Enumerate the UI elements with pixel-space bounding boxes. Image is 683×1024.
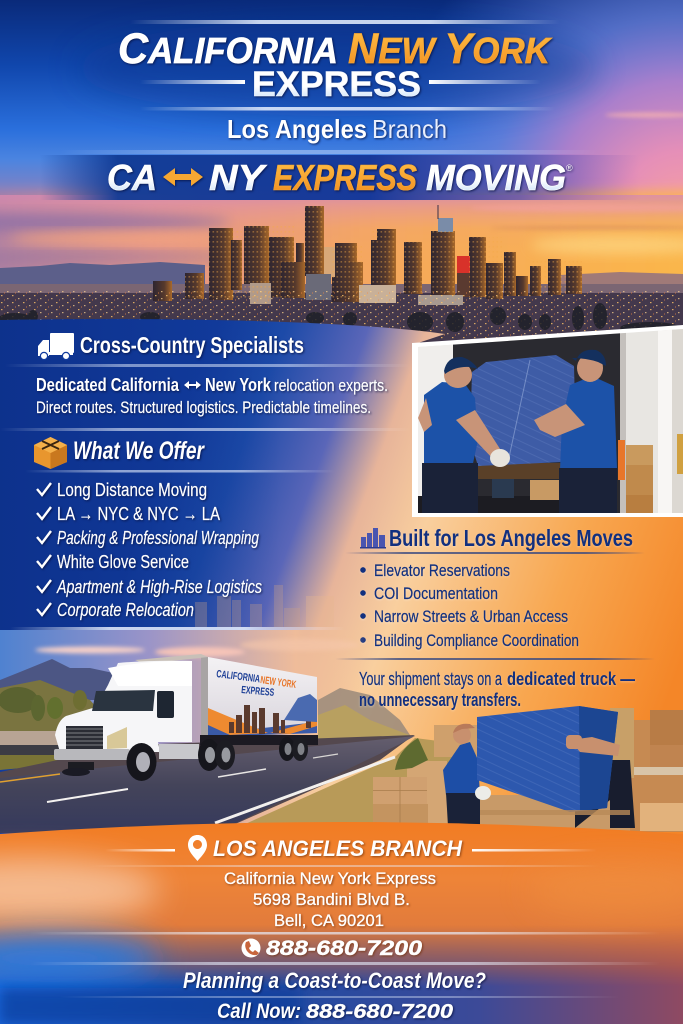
- call to action: call now: [217, 1000, 453, 1023]
- text block: specialists description: relocation experts.: [274, 376, 388, 395]
- banner: CA to NY Express Moving: NY: [209, 157, 267, 198]
- title underlay rule lines: [60, 20, 600, 154]
- banner: CA to NY Express Moving: MOVING: [426, 157, 566, 198]
- background: blue to sunset sky: [0, 0, 683, 215]
- skyline: downtown Los Angeles at dusk: [0, 205, 683, 346]
- footer rules: [30, 849, 660, 998]
- title: California New York: [118, 25, 553, 73]
- text block: dedicated truck note: dedicated truck —: [507, 668, 635, 689]
- title: California New York: NEW YORK: [348, 25, 553, 73]
- icon: moving truck: [38, 333, 74, 360]
- item: corporate: Corporate Relocation: [57, 600, 194, 620]
- truck: white semi with branded trailer: CALIFORNIA: [216, 668, 261, 685]
- text block: branch address: California New York Express: [224, 869, 436, 888]
- section rules: [0, 364, 410, 630]
- heading: Los Angeles Branch: LOS ANGELES BRANCH: [213, 836, 463, 861]
- icon: phone: [242, 938, 260, 958]
- banner: CA to NY Express Moving: EXPRESS: [273, 157, 417, 198]
- banner: CA to NY Express Moving: ®: [566, 163, 573, 173]
- call to action: call now: 888-680-7200: [306, 1001, 453, 1023]
- sunset band behind skyline: [0, 192, 683, 352]
- item: white glove: White Glove Service: [57, 552, 189, 572]
- text block: specialists description: [36, 375, 388, 417]
- item: long distance moving: Long Distance Moving: [57, 480, 207, 500]
- subtitle: Los Angeles Branch: Los Angeles: [227, 114, 367, 144]
- rule under LA heading: [345, 552, 645, 554]
- text block: specialists description: New York: [205, 375, 272, 395]
- faint skyline behind offer list: [195, 585, 334, 627]
- text block: branch address: Bell, CA 90201: [274, 911, 384, 930]
- truck: white semi with branded trailer: [54, 654, 318, 781]
- text block: specialists description: Direct routes. Structured logistics. Predictable timelines.: [36, 398, 371, 417]
- item: apartment: Apartment & High-Rise Logistics: [56, 577, 262, 597]
- title: California New York: CALIFORNIA: [118, 25, 338, 73]
- icon: cardboard box: [34, 437, 67, 469]
- heading: What We Offer: What We Offer: [73, 437, 205, 465]
- text block: specialists description: Dedicated California: [36, 375, 180, 395]
- text block: branch address: 5698 Bandini Blvd B.: [253, 890, 410, 909]
- item: COI: COI Documentation: [374, 584, 498, 603]
- banner: CA to NY Express Moving: [40, 155, 640, 200]
- subtitle: Los Angeles Branch: Branch: [372, 114, 447, 144]
- rule above shipment note: [335, 658, 655, 660]
- truck: white semi with branded trailer: EXPRESS: [241, 684, 275, 699]
- panel: main blue to orange body: [0, 319, 683, 840]
- phone number: 888-680-7200: [266, 937, 422, 960]
- photo: movers carrying wrapped furniture beside boxes: [373, 706, 683, 835]
- text block: dedicated truck note: Your shipment stays on a: [359, 669, 503, 689]
- list: what we offer checklist: [37, 480, 262, 620]
- item: narrow streets: Narrow Streets & Urban Access: [374, 607, 568, 626]
- heading: Cross-Country Specialists: Cross-Country Specialists: [80, 332, 304, 358]
- title: Express: EXPRESS: [252, 65, 421, 104]
- item: compliance: Building Compliance Coordination: [374, 631, 579, 650]
- photo: movers loading wrapped furniture into truck: [412, 325, 683, 517]
- item: elevator: Elevator Reservations: [374, 561, 510, 580]
- list: Los Angeles services: [360, 561, 579, 650]
- icon: small two-way arrow: [184, 381, 201, 389]
- text block: dedicated truck note: [359, 668, 635, 710]
- road scene: truck on highway: [0, 630, 470, 833]
- subtitle: Los Angeles Branch: [227, 114, 447, 144]
- call to action: call now: Call Now:: [217, 1000, 301, 1023]
- truck: white semi with branded trailer: NEW YORK: [260, 674, 297, 691]
- icon: location pin: [188, 835, 207, 861]
- item: LA NYC routes: LA → NYC & NYC → LA: [57, 504, 220, 524]
- icon: city buildings: [360, 528, 386, 548]
- panel: orange branch footer: [0, 822, 683, 1024]
- text block: dedicated truck note: no unnecessary transfers.: [359, 690, 521, 710]
- text block: branch address: [224, 869, 436, 930]
- call to action: planning a move: Planning a Coast-to-Coast Move?: [183, 968, 486, 993]
- icon: two-way arrow: [163, 168, 203, 186]
- banner: CA to NY Express Moving: CA: [107, 157, 157, 198]
- item: packing: Packing & Professional Wrapping: [57, 528, 259, 548]
